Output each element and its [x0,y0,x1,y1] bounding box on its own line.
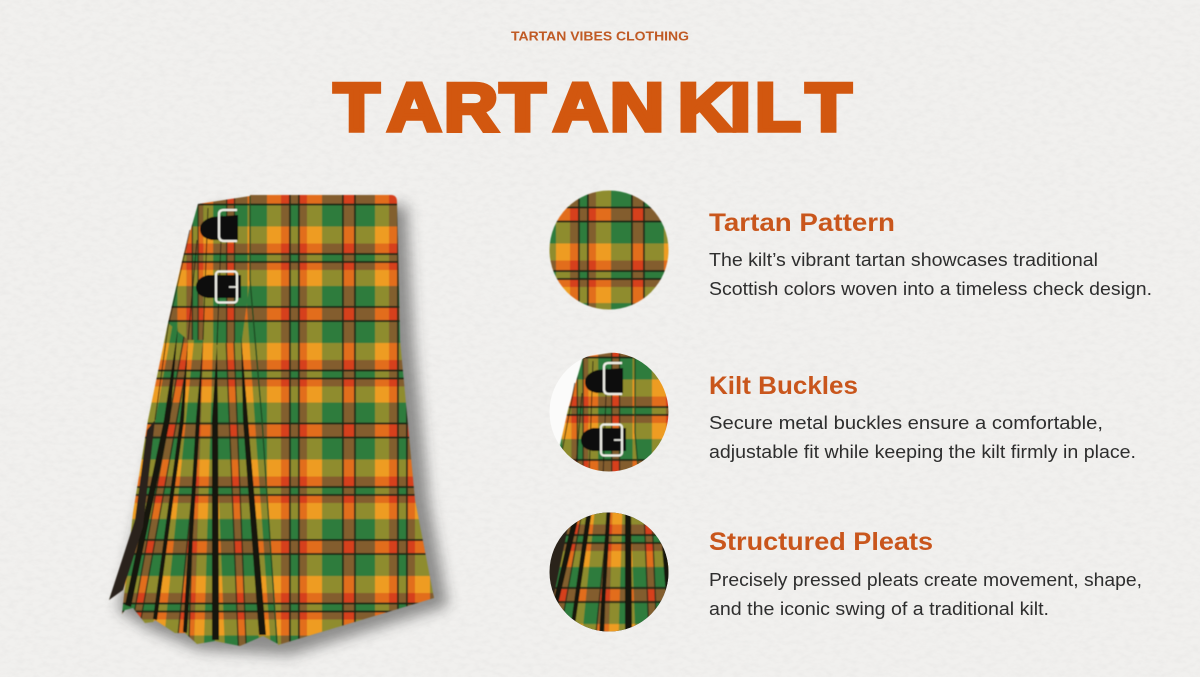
feature: kilt buckles text: Secure metal buckles ensure a comfortable, [709,413,1103,433]
kilt garment [109,195,434,646]
dark back pleat flap [109,420,155,600]
brand label: TARTAN VIBES CLOTHING [511,28,689,44]
lower buckle and strap [196,272,241,302]
feature: tartan pattern text [709,209,1152,299]
buckles and straps [196,210,241,302]
feature: structured pleats text: and the iconic swing of a traditional kilt. [709,599,1049,619]
feature: structured pleats text: Structured Pleats [709,528,933,556]
pleat fold lines [125,196,277,643]
kilt illustration [109,195,448,655]
feature: structured pleats text: Precisely pressed pleats create movement, shape, [709,570,1142,590]
feature: kilt buckles text: Kilt Buckles [709,372,858,400]
feature: kilt buckles text: adjustable fit while keeping the kilt firmly in place. [709,442,1136,462]
detail circle: structured pleats [550,512,668,632]
feature: tartan pattern text: Scottish colors woven into a timeless check design. [709,279,1152,299]
feature: tartan pattern text: The kilt’s vibrant tartan showcases traditional [709,250,1098,270]
top buckle and strap [200,210,238,241]
detail circle: tartan pattern [550,190,668,310]
feature: kilt buckles text [709,372,1136,462]
feature: structured pleats text [709,528,1142,619]
apron front panel [250,195,434,645]
title: TARTAN KILT [334,70,851,146]
detail circle: kilt buckles [550,352,668,472]
kilt shadow [118,205,448,655]
feature: tartan pattern text: Tartan Pattern [709,209,895,237]
pleated left section [122,196,278,646]
